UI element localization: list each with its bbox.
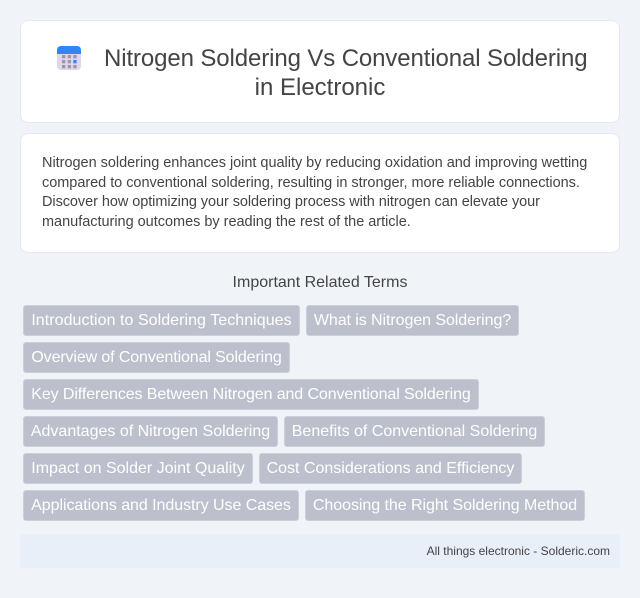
tag: Key Differences Between Nitrogen and Conventional Soldering bbox=[31, 386, 471, 403]
title: in Electronic bbox=[255, 74, 385, 101]
title bbox=[104, 45, 587, 101]
tag bbox=[305, 490, 585, 521]
tag: Applications and Industry Use Cases bbox=[31, 497, 291, 514]
tag: Advantages of Nitrogen Soldering bbox=[31, 423, 270, 440]
tag: Introduction to Soldering Techniques bbox=[31, 312, 292, 329]
intro paragraph: Nitrogen soldering enhances joint quality by reducing oxidation and improving wetting bbox=[42, 155, 587, 171]
intro paragraph bbox=[42, 155, 587, 230]
tag: Cost Considerations and Efficiency bbox=[267, 460, 514, 477]
tag bbox=[23, 490, 299, 521]
tag: Benefits of Conventional Soldering bbox=[292, 423, 537, 440]
tag: Impact on Solder Joint Quality bbox=[31, 460, 245, 477]
tag: Choosing the Right Soldering Method bbox=[313, 497, 577, 514]
header card bbox=[20, 20, 620, 123]
tag: What is Nitrogen Soldering? bbox=[314, 312, 511, 329]
footer credit: All things electronic - Solderic.com bbox=[427, 544, 610, 558]
tag: Overview of Conventional Soldering bbox=[31, 349, 282, 366]
footer bar bbox=[20, 534, 620, 568]
tag bbox=[259, 453, 522, 484]
tag bbox=[306, 305, 519, 336]
tag bbox=[23, 379, 479, 410]
title: Nitrogen Soldering Vs Conventional Soldering bbox=[104, 45, 587, 72]
tag bbox=[284, 416, 545, 447]
intro paragraph: manufacturing outcomes by reading the rest of the article. bbox=[42, 214, 411, 230]
intro text panel bbox=[20, 133, 620, 253]
tag bbox=[23, 305, 300, 336]
tag bbox=[23, 453, 253, 484]
icon: calendar grid bbox=[57, 46, 81, 70]
related terms heading: Important Related Terms bbox=[233, 274, 407, 291]
related terms tags bbox=[23, 305, 585, 521]
intro paragraph: Discover how optimizing your soldering process with nitrogen can elevate your bbox=[42, 194, 540, 210]
tag bbox=[23, 416, 278, 447]
intro paragraph: compared to conventional soldering, resulting in stronger, more reliable connections. bbox=[42, 174, 580, 190]
tag bbox=[23, 342, 290, 373]
